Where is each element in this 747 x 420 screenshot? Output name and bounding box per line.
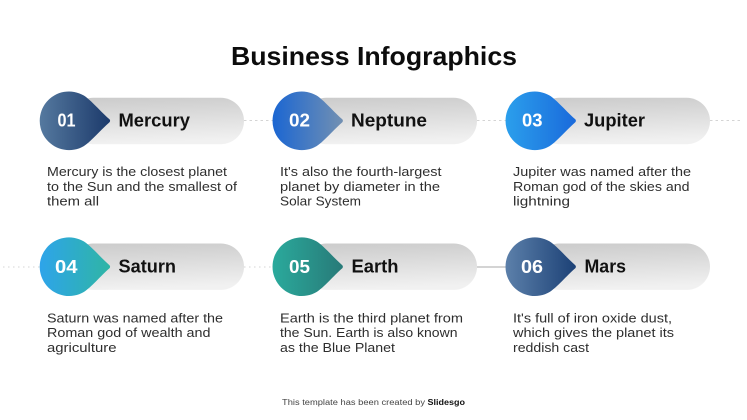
description: lightning (513, 194, 570, 208)
marker 05: 05 (289, 256, 310, 277)
description: Roman god of the skies and (513, 179, 690, 194)
description: It's full of iron oxide dust, (513, 310, 672, 326)
description: agriculture (47, 340, 116, 355)
pill (70, 244, 244, 290)
footer credit (282, 398, 465, 407)
description: as the Blue Planet (280, 340, 395, 355)
pill (536, 98, 710, 144)
description: Jupiter was named after the (513, 164, 691, 179)
marker 03 (506, 92, 576, 150)
description (512, 310, 675, 355)
description: Earth is the third planet from (280, 310, 463, 326)
pill (70, 98, 244, 144)
description: Solar System (280, 194, 361, 208)
heading: Earth (352, 256, 398, 276)
description: them all (47, 194, 99, 208)
description: reddish cast (513, 340, 589, 355)
description (280, 310, 463, 355)
description: which gives the planet its (512, 325, 675, 340)
heading: Jupiter (584, 110, 645, 130)
connector: Neptune to Jupiter (477, 120, 506, 122)
marker 04: 04 (55, 256, 78, 277)
description: Mercury is the closest planet (47, 164, 227, 179)
marker 06 (506, 237, 576, 296)
marker 05 (273, 237, 343, 296)
pill (303, 244, 477, 290)
description: to the Sun and the smallest of (47, 179, 237, 194)
description: Saturn was named after the (47, 310, 223, 326)
description: the Sun. Earth is also known (280, 325, 458, 340)
description (47, 310, 223, 355)
connector: Jupiter to edge (710, 120, 743, 122)
connector: Saturn to Earth (244, 266, 273, 268)
description (280, 164, 442, 208)
description (513, 164, 691, 208)
marker 03: 03 (522, 110, 542, 130)
panel: Mercury (40, 92, 244, 208)
marker 02 (273, 92, 343, 150)
footer credit: Slidesgo (428, 398, 465, 407)
description (47, 164, 237, 208)
connector: Earth to Mars (477, 266, 506, 268)
marker 06: 06 (521, 256, 543, 277)
connector: edge to Saturn (3, 266, 40, 268)
description: It's also the fourth-largest (280, 164, 442, 179)
marker 01: 01 (58, 110, 76, 130)
panel: Saturn (40, 237, 244, 355)
heading: Mercury (118, 110, 190, 130)
title: Business Infographics (231, 41, 517, 71)
marker 01 (40, 92, 110, 150)
pill (303, 98, 477, 144)
heading: Mars (584, 256, 626, 276)
panel: Jupiter (506, 92, 710, 208)
description: planet by diameter in the (280, 179, 440, 194)
panel: Neptune (273, 92, 477, 208)
panel: Mars (506, 237, 710, 355)
panel: Earth (273, 237, 477, 355)
connector: Mercury to Neptune (244, 120, 273, 122)
description: Roman god of wealth and (47, 325, 210, 340)
heading: Neptune (351, 110, 427, 130)
heading: Saturn (118, 256, 176, 276)
marker 04 (40, 237, 110, 296)
pill (536, 244, 710, 290)
footer credit: This template has been created by (282, 398, 425, 407)
marker 02: 02 (289, 110, 310, 130)
